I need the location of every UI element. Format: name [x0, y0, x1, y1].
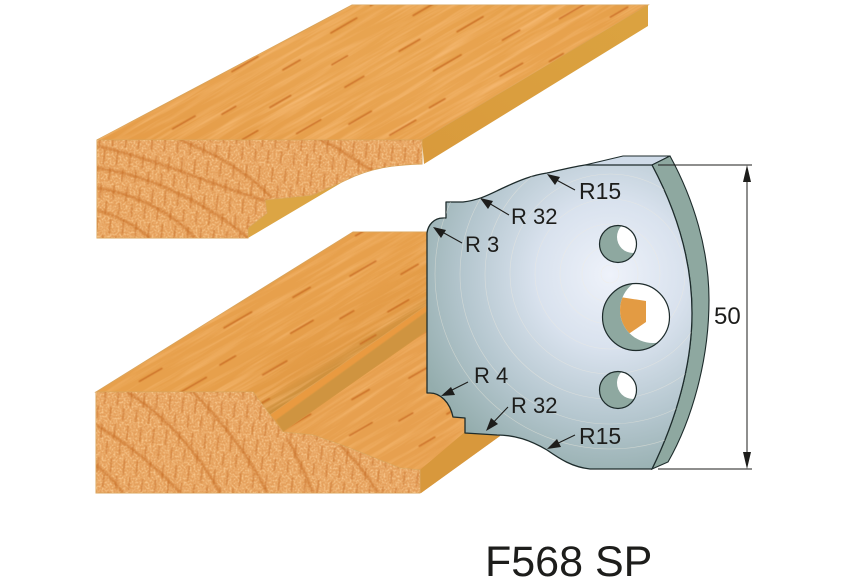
upper small hole	[598, 224, 638, 264]
dimension arrowheads	[743, 165, 751, 469]
height dimension 50	[658, 165, 752, 469]
callout R3	[433, 227, 499, 257]
radius callouts	[433, 174, 621, 449]
groove shadow	[276, 302, 440, 432]
knife top bevel	[585, 156, 670, 165]
callout R4	[441, 363, 508, 396]
callout R4: R 4	[474, 363, 508, 388]
callout R15 top: R15	[579, 178, 621, 204]
board base fill	[96, 232, 500, 493]
lower wood board	[94, 232, 500, 494]
machining rings	[434, 174, 692, 450]
groove bead	[270, 296, 440, 420]
callout R32 bottom: R 32	[511, 393, 557, 418]
callout R32 bottom	[486, 393, 557, 431]
underside cove	[248, 180, 346, 238]
lower small hole	[598, 370, 638, 410]
board top face	[96, 4, 650, 140]
end grain	[90, 388, 425, 496]
large centre hole	[602, 282, 670, 352]
callout R15 bottom: R15	[579, 423, 621, 449]
cutter profile infographic	[94, 4, 752, 494]
lower side face	[420, 431, 500, 493]
dimension value: 50	[714, 303, 741, 330]
callout R32 top: R 32	[511, 204, 557, 229]
lower moulding face	[284, 332, 464, 470]
knife edge side	[652, 156, 709, 469]
callout R15 top	[547, 174, 621, 204]
board side face	[422, 5, 648, 164]
knife face	[427, 165, 692, 469]
callout R3: R 3	[465, 232, 499, 257]
callout R32 top	[480, 198, 557, 229]
upper wood board	[96, 4, 650, 238]
callout R15 bottom	[547, 423, 621, 449]
board end grain	[96, 140, 422, 238]
cutter knife	[426, 155, 710, 470]
upper slope face	[94, 232, 427, 415]
